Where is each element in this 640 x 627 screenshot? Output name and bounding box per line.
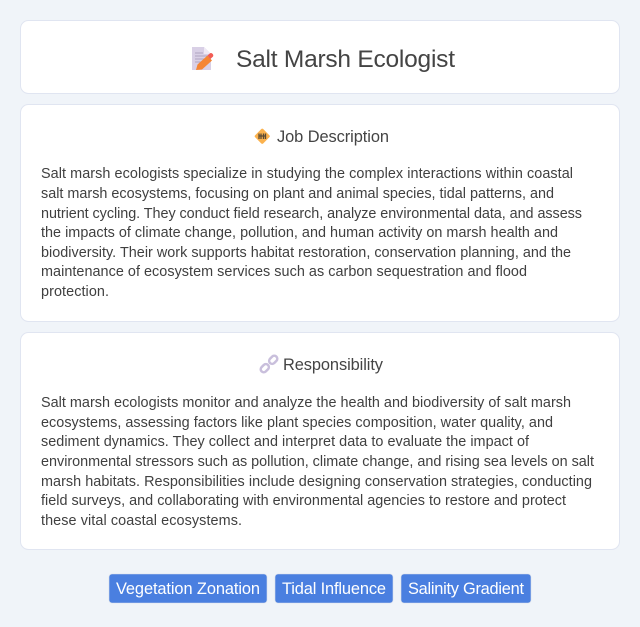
panel: title (20, 20, 620, 94)
text block: job description: nutrient cycling. They conduct field research, analyze environmental data, and assess (41, 206, 582, 222)
text block: job description: protection. (41, 284, 109, 300)
heading: responsibility: Responsibility (283, 356, 384, 374)
text block: job description: biodiversity. Their work supports habitat restoration, conservation planning, and the (41, 245, 571, 261)
text block: job description: salt marsh ecosystems, focusing on plant and animal species, tidal patterns, and (41, 186, 554, 202)
tag: salinity gradient (401, 574, 531, 603)
text block: responsibility: these vital coastal ecosystems. (41, 513, 242, 529)
text block: job description: maintenance of ecosystem services such as carbon sequestration and flood (41, 264, 527, 280)
text block: job description: the impacts of climate change, pollution, and human activity on marsh health and (41, 225, 558, 241)
icon: memo with pencil (192, 47, 213, 70)
panel: responsibility (20, 332, 620, 550)
text block: responsibility (41, 395, 594, 529)
text block: responsibility: environmental stressors such as pollution, climate change, and rising sea levels on salt (41, 454, 594, 470)
icon: chain link (259, 354, 279, 374)
tag: tidal influence: Tidal Influence (282, 580, 386, 598)
icon: orange diamond (254, 128, 270, 144)
tag: vegetation zonation (109, 574, 267, 603)
text block: job description: Salt marsh ecologists specialize in studying the complex interactions within coastal (41, 166, 573, 182)
tag: vegetation zonation: Vegetation Zonation (116, 580, 260, 598)
heading: job description: Job Description (277, 128, 389, 146)
text block: responsibility: ecosystems, assessing factors like plant species composition, water quality, and (41, 415, 553, 431)
text block: responsibility: marsh habitats. Responsibilities include designing conservation strategies, conducting (41, 474, 592, 490)
text block: job description (41, 166, 582, 300)
panel: job description (20, 104, 620, 322)
tag: tidal influence (275, 574, 393, 603)
heading: title text: Salt Marsh Ecologist (236, 46, 455, 73)
text block: responsibility: field surveys, and collaborating with environmental agencies to restore and protect (41, 493, 566, 509)
text block: responsibility: Salt marsh ecologists monitor and analyze the health and biodiversity of salt marsh (41, 395, 571, 411)
tag: salinity gradient: Salinity Gradient (408, 580, 524, 598)
text block: responsibility: sediment dynamics. They collect and interpret data to evaluate the impact of (41, 434, 530, 450)
